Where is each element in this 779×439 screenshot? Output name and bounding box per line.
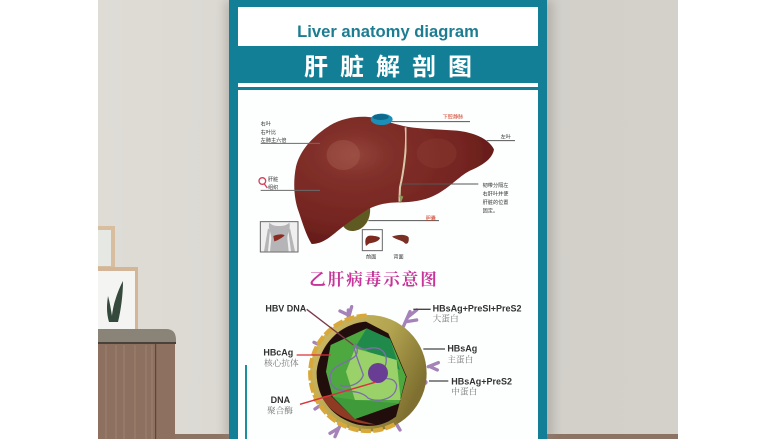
DNA strands (330, 343, 397, 400)
liver diagram (259, 112, 515, 260)
sublabels: 聚合酶 (267, 404, 293, 415)
liver labels: 右叶比 (261, 128, 276, 136)
panel: diagram body (238, 90, 538, 439)
wall background (98, 0, 678, 439)
cabinet (98, 329, 176, 439)
liver shape (294, 117, 494, 244)
icon: liver back (392, 235, 409, 244)
leader lines (297, 309, 448, 404)
heading: hepatitis B virus diagram: 乙肝病毒示意图 (309, 269, 439, 289)
sublabels: 中蛋白 (451, 386, 477, 397)
sublabels: 大蛋白 (433, 313, 459, 324)
liver labels: 韧带分隔左 (483, 181, 508, 189)
small picture frame (98, 226, 115, 268)
highlight: right lobe (327, 140, 360, 170)
gallbladder (343, 206, 370, 231)
red labels: 下腔静脉 (443, 112, 464, 120)
labels left: HBsAg+PreSI+PreS2 (433, 303, 522, 313)
sublabels: 核心抗体 (264, 357, 299, 368)
liver labels: 左肺主六倍 (261, 136, 286, 144)
labels left: HBV DNA (265, 303, 307, 313)
icon: plant (107, 281, 123, 322)
labels left: HBsAg+PreS2 (451, 376, 512, 386)
labels left: HBsAg (447, 344, 477, 354)
white strip (238, 83, 538, 87)
labels left: DNA (271, 395, 291, 405)
teal side line (245, 365, 247, 439)
virus diagram (245, 303, 522, 439)
liver labels: 背面 (393, 252, 404, 260)
spikes (314, 307, 438, 437)
liver labels: 前面 (366, 252, 376, 260)
heading panel: English title: Liver anatomy diagram (297, 22, 479, 41)
cut-away interior (317, 322, 407, 426)
red labels: 胆囊 (426, 214, 436, 222)
poster shadow (225, 0, 553, 439)
labels left: HBcAg (263, 348, 293, 358)
liver labels: 肝脏的位置 (483, 198, 508, 206)
liver labels: 肝脏 (268, 175, 278, 183)
red labels (426, 112, 464, 222)
liver labels: 固定。 (483, 207, 498, 215)
liver labels: 左叶 (501, 133, 511, 141)
green capsid (326, 328, 406, 419)
ligament (399, 127, 406, 202)
outer shell (310, 315, 427, 432)
labels left (263, 303, 522, 405)
baseboard (175, 434, 678, 439)
liver labels (261, 120, 511, 260)
icon: magnifier (259, 178, 267, 188)
liver labels: 右叶 (261, 120, 271, 128)
sublabels: 主蛋白 (447, 353, 473, 364)
heading panel: English title (238, 7, 538, 46)
icon: vena cava (371, 114, 393, 125)
liver labels: 右肝叶并使 (483, 189, 508, 197)
leader lines (261, 122, 515, 221)
sublabels (264, 313, 477, 415)
poster frame (229, 0, 547, 439)
large picture frame with plant (98, 267, 138, 333)
shell ring (310, 316, 397, 431)
liver labels: 组织 (268, 183, 278, 191)
icon: liver front (362, 230, 382, 251)
icon: body silhouette (260, 222, 298, 252)
purple core (368, 363, 388, 383)
heading: Chinese title: 肝脏解剖图 (304, 54, 484, 81)
highlight: left lobe (417, 138, 457, 168)
